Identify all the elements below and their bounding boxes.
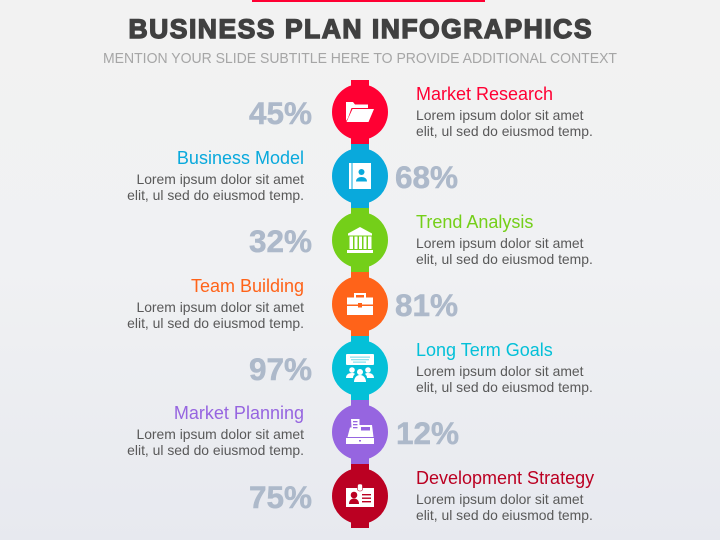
text: development strategy: Lorem ipsum dolor sit amet bbox=[416, 491, 584, 507]
node 1 bbox=[332, 80, 388, 144]
step 3: trend analysis bbox=[249, 208, 593, 272]
subtitle: MENTION YOUR SLIDE SUBTITLE HERE TO PROVIDE ADDITIONAL CONTEXT bbox=[103, 51, 617, 67]
step 7: development strategy bbox=[249, 464, 594, 528]
text: market research: elit, ul sed do eiusmod temp. bbox=[416, 123, 593, 139]
text: trend analysis: Trend Analysis bbox=[416, 212, 533, 232]
text: market planning: Lorem ipsum dolor sit amet bbox=[136, 426, 304, 442]
text: business model: Business Model bbox=[177, 148, 304, 168]
icon: id badge bbox=[346, 484, 374, 507]
text: team building: elit, ul sed do eiusmod temp. bbox=[127, 315, 304, 331]
icon: briefcase bbox=[347, 293, 373, 315]
text: long term goals: Long Term Goals bbox=[416, 340, 553, 360]
percentage 45%: 45% bbox=[249, 95, 312, 131]
text: development strategy: Development Strategy bbox=[416, 468, 594, 488]
icon: folder bbox=[346, 102, 374, 122]
node 2 bbox=[332, 144, 388, 208]
text: team building: Team Building bbox=[191, 276, 304, 296]
percentage 97%: 97% bbox=[249, 351, 312, 387]
step 6: market planning bbox=[127, 400, 459, 464]
top accent bar bbox=[252, 0, 485, 2]
percentage 32%: 32% bbox=[249, 223, 312, 259]
text: business model: Lorem ipsum dolor sit amet bbox=[136, 171, 304, 187]
text: team building: Lorem ipsum dolor sit amet bbox=[136, 299, 304, 315]
icon: contact book bbox=[349, 163, 371, 189]
percentage 12%: 12% bbox=[396, 415, 459, 451]
text: business model bbox=[127, 148, 304, 203]
node 3 bbox=[332, 208, 388, 272]
node 6 bbox=[332, 400, 388, 464]
text: market research: Lorem ipsum dolor sit amet bbox=[416, 107, 584, 123]
text: trend analysis: elit, ul sed do eiusmod temp. bbox=[416, 251, 593, 267]
text: team building bbox=[127, 276, 304, 331]
text: long term goals: Lorem ipsum dolor sit amet bbox=[416, 363, 584, 379]
step 5: long term goals bbox=[249, 336, 593, 400]
step 2: business model bbox=[127, 144, 458, 208]
text: development strategy bbox=[416, 468, 594, 523]
text: market planning: elit, ul sed do eiusmod temp. bbox=[127, 442, 304, 458]
text: long term goals bbox=[416, 340, 593, 395]
text: market research bbox=[416, 84, 593, 139]
text: business model: elit, ul sed do eiusmod temp. bbox=[127, 187, 304, 203]
step 4: team building bbox=[127, 272, 458, 336]
text: market planning bbox=[127, 403, 304, 458]
text: market research: Market Research bbox=[416, 84, 553, 104]
step 1: market research bbox=[249, 80, 593, 144]
text: long term goals: elit, ul sed do eiusmod temp. bbox=[416, 379, 593, 395]
node 4 bbox=[332, 272, 388, 336]
text: market planning: Market Planning bbox=[174, 403, 304, 423]
icon: cash register bbox=[346, 419, 374, 444]
percentage 68%: 68% bbox=[395, 159, 458, 195]
node 5 bbox=[332, 336, 388, 400]
text: trend analysis bbox=[416, 212, 593, 267]
percentage 75%: 75% bbox=[249, 479, 312, 515]
text: trend analysis: Lorem ipsum dolor sit amet bbox=[416, 235, 584, 251]
text: development strategy: elit, ul sed do eiusmod temp. bbox=[416, 507, 593, 523]
icon: bank building bbox=[347, 227, 373, 253]
percentage 81%: 81% bbox=[395, 287, 458, 323]
title: BUSINESS PLAN INFOGRAPHICS bbox=[128, 14, 592, 44]
icon: meeting presentation bbox=[346, 354, 374, 382]
node 7 bbox=[332, 464, 388, 528]
